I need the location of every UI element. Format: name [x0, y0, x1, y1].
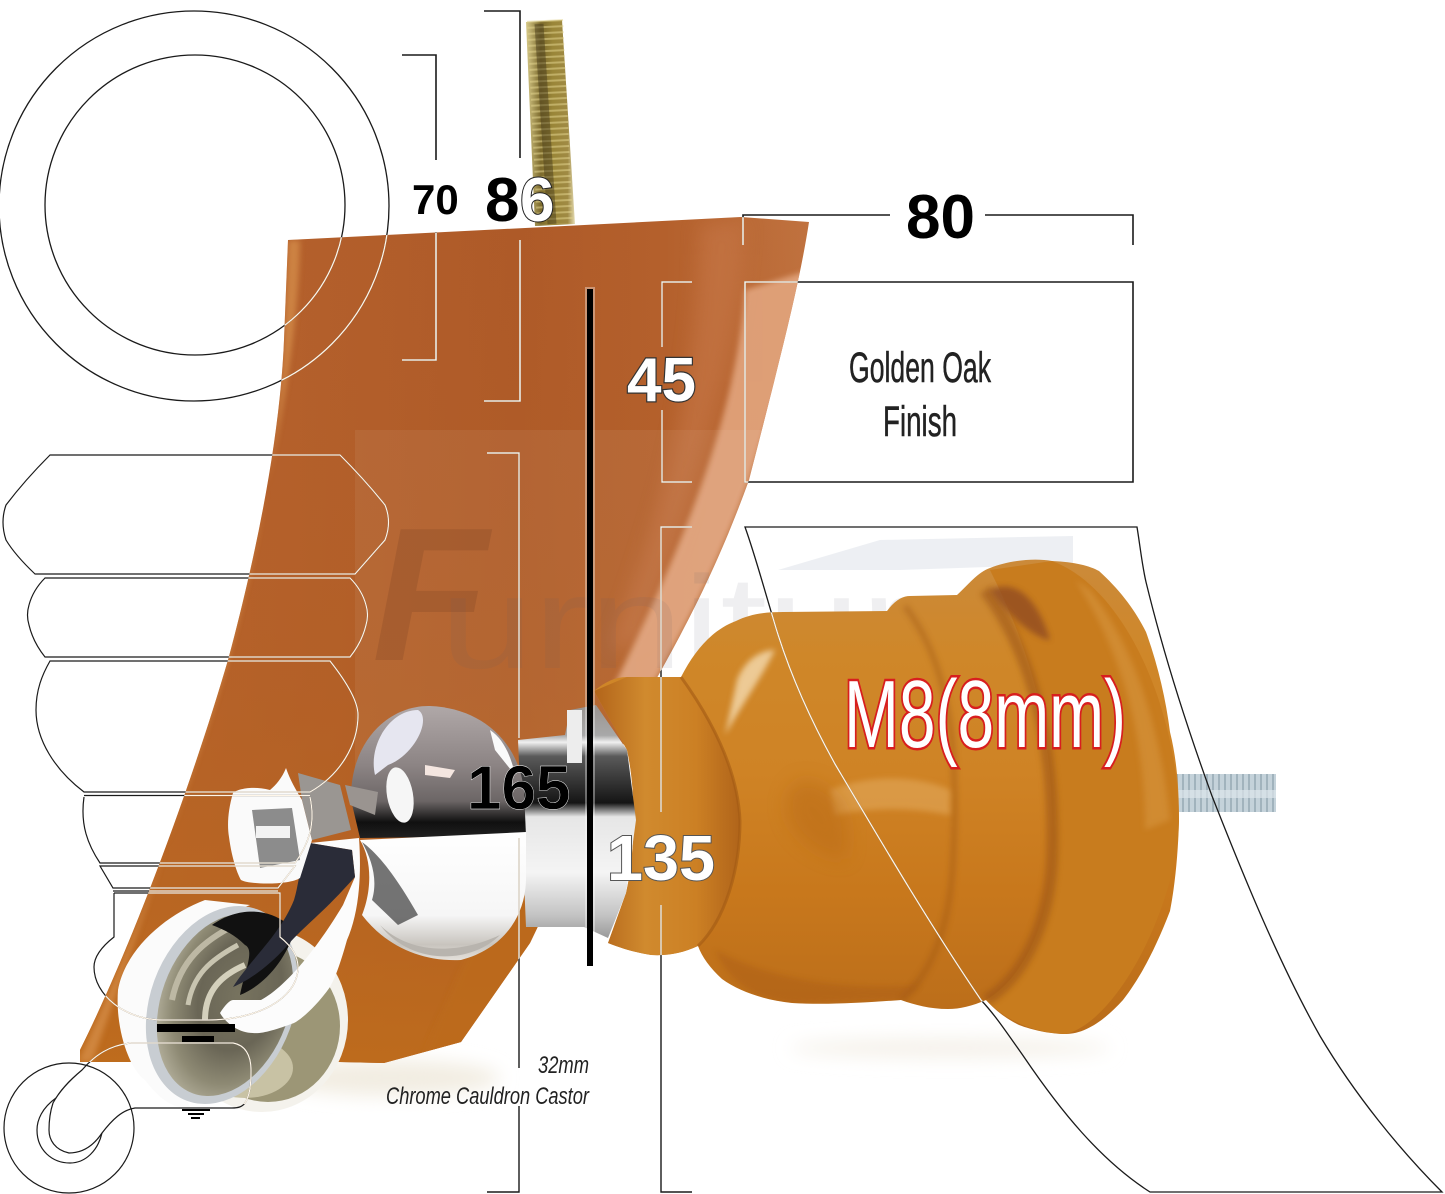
- turned wooden knob: [594, 560, 1179, 1034]
- floor shadow: [280, 1039, 1110, 1096]
- wooden sabre leg: [78, 217, 810, 1063]
- black bars and ground symbol: [157, 1024, 235, 1119]
- collar: [518, 705, 636, 938]
- dimension lines, white on objects: [88, 217, 983, 1104]
- label: Golden Oak Finish: Golden Oak: [849, 344, 991, 392]
- side threaded stud: [1176, 774, 1277, 812]
- label: Golden Oak Finish: [849, 344, 991, 446]
- centre bar: [585, 287, 595, 967]
- label: castor: 32mm: [538, 1052, 589, 1079]
- front wheel rim: [118, 885, 325, 1125]
- label: 70: 70: [412, 176, 459, 223]
- label: 86: [485, 166, 554, 235]
- top threaded stud: [526, 20, 575, 226]
- label: castor: [386, 1052, 590, 1110]
- watermark roof on white: [778, 536, 1073, 570]
- ball: [345, 706, 526, 838]
- label: M8(8mm): M8(8mm): [844, 661, 1126, 768]
- back wheel: [176, 928, 348, 1112]
- watermark: F: [372, 489, 493, 701]
- bell: [360, 832, 526, 960]
- label: 86: 8: [485, 166, 519, 235]
- chrome castor: [118, 705, 636, 1125]
- label: 86: 6: [520, 166, 554, 235]
- watermark: [355, 430, 1075, 770]
- label: 165: 165: [467, 754, 570, 823]
- label: Golden Oak Finish: Finish: [883, 398, 957, 446]
- label: 45: 45: [627, 346, 696, 415]
- axle nut: [228, 768, 351, 884]
- label: 135: 135: [607, 822, 715, 894]
- fork arm: [220, 838, 360, 1033]
- label: castor: Chrome Cauldron Castor: [386, 1083, 590, 1110]
- label: 80: 80: [906, 183, 975, 252]
- watermark: urniture: [440, 549, 1010, 696]
